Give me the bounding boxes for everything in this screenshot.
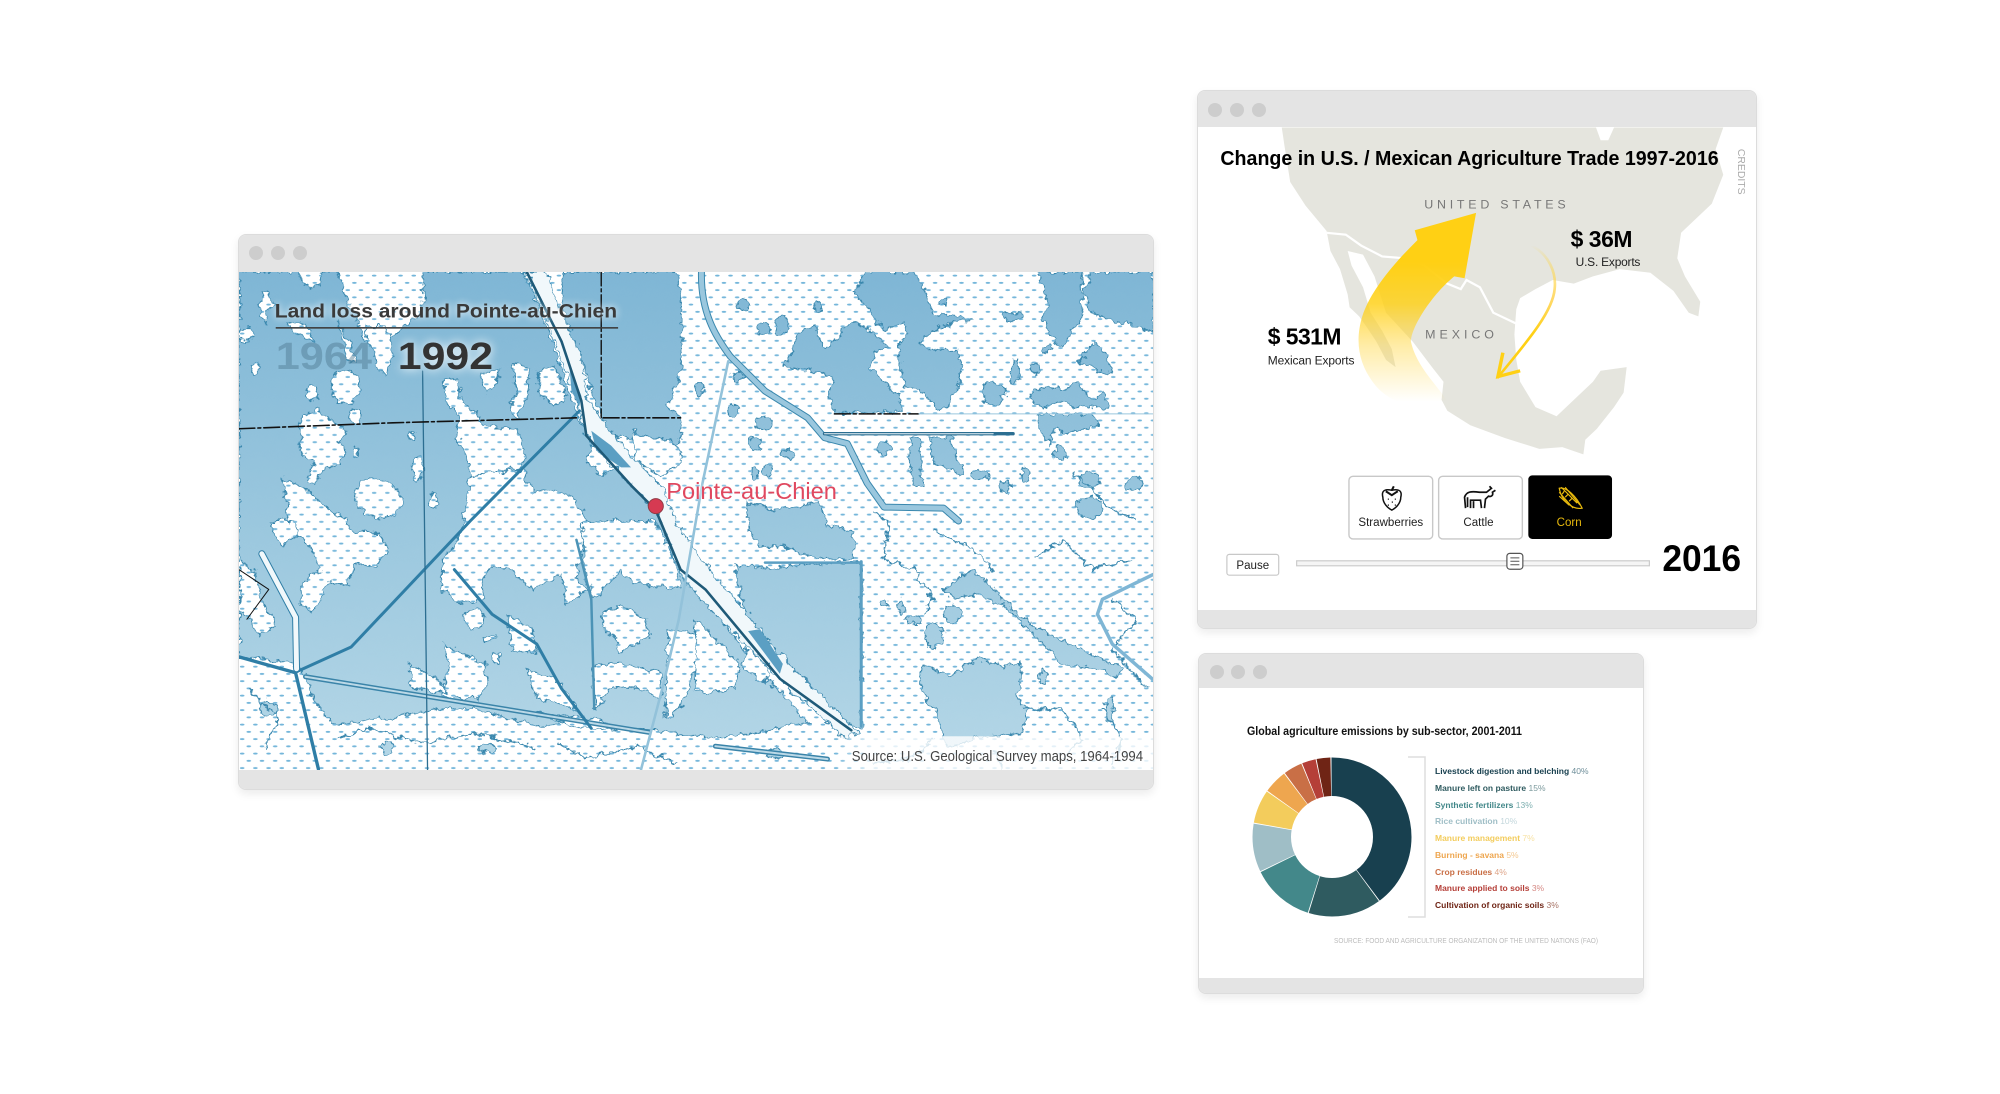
credits link: CREDITS bbox=[1735, 149, 1746, 195]
large export arrow bbox=[1359, 213, 1476, 402]
trade chart bbox=[1220, 128, 1746, 579]
legend: Burning - savana 5% bbox=[1435, 850, 1519, 860]
small export arrow bbox=[1497, 246, 1555, 378]
panel: emissions donut window bbox=[1198, 653, 1644, 994]
panel: trade map window bbox=[1197, 90, 1757, 629]
timeline slider bbox=[1297, 553, 1649, 569]
location label: Pointe-au-Chien bbox=[666, 478, 837, 504]
legend bracket bbox=[1408, 757, 1425, 917]
chart title: Global agriculture emissions by sub-sector, 2001-2011 bbox=[1247, 726, 1523, 738]
button: cattle bbox=[1439, 476, 1522, 539]
pause button: Pause bbox=[1236, 560, 1269, 572]
marsh streams bbox=[249, 470, 1147, 770]
slider handle bbox=[1507, 553, 1523, 569]
legend bbox=[1435, 766, 1589, 910]
title bar bbox=[1198, 91, 1756, 127]
legend: Rice cultivation 10% bbox=[1435, 816, 1518, 826]
title bar bbox=[239, 235, 1153, 272]
product buttons bbox=[1349, 475, 1612, 539]
footer bar bbox=[1199, 978, 1643, 993]
border line bbox=[1327, 233, 1516, 324]
button: corn (active): Corn bbox=[1557, 517, 1582, 529]
source note: SOURCE: FOOD AND AGRICULTURE ORGANIZATION OF THE UNITED NATIONS (FAO) bbox=[1334, 936, 1598, 945]
icon: cattle bbox=[1465, 486, 1495, 508]
caption: US exports: U.S. Exports bbox=[1576, 255, 1640, 269]
source band bbox=[834, 736, 1153, 770]
year 1992: 1992 bbox=[398, 335, 493, 377]
value: Mexican exports: $ 531M bbox=[1268, 324, 1341, 350]
legend: Crop residues 4% bbox=[1435, 867, 1507, 877]
icon: strawberry bbox=[1382, 486, 1401, 510]
faded year 1964: 1964 bbox=[276, 335, 372, 377]
button: strawberries: Strawberries bbox=[1358, 517, 1423, 529]
pause button bbox=[1227, 554, 1279, 575]
button: strawberries bbox=[1349, 476, 1433, 539]
donut chart section bbox=[1247, 726, 1598, 945]
caption: Mexican exports: Mexican Exports bbox=[1268, 354, 1354, 368]
chart title: Change in U.S. / Mexican Agriculture Trade 1997-2016 bbox=[1220, 148, 1719, 170]
label: Mexico: MEXICO bbox=[1425, 328, 1494, 342]
button: cattle: Cattle bbox=[1463, 517, 1494, 529]
legend: Manure left on pasture 15% bbox=[1435, 783, 1546, 793]
footer bar bbox=[1198, 610, 1756, 628]
map title: Land loss around Pointe-au-Chien bbox=[275, 301, 617, 323]
map illustration bbox=[239, 272, 1153, 770]
legend: Cultivation of organic soils 3% bbox=[1435, 900, 1559, 910]
donut chart bbox=[1272, 777, 1392, 897]
river bank strip bbox=[527, 272, 859, 738]
legend: Manure management 7% bbox=[1435, 833, 1535, 843]
label: United States: UNITED STATES bbox=[1424, 198, 1566, 211]
landmass bbox=[1282, 127, 1723, 454]
footer bar bbox=[239, 770, 1153, 789]
button: corn (active) bbox=[1528, 475, 1612, 539]
location marker bbox=[648, 499, 663, 514]
channels and roads bbox=[239, 272, 1153, 770]
icon: corn bbox=[1559, 487, 1582, 508]
legend: Synthetic fertilizers 13% bbox=[1435, 800, 1533, 810]
title rule bbox=[276, 327, 618, 329]
panel: land loss map window bbox=[238, 234, 1154, 790]
title bar bbox=[1199, 654, 1643, 688]
value: US exports: $ 36M bbox=[1571, 226, 1632, 252]
year readout: 2016 bbox=[1662, 537, 1741, 579]
legend: Livestock digestion and belching 40% bbox=[1435, 766, 1589, 776]
legend: Manure applied to soils 3% bbox=[1435, 883, 1545, 893]
